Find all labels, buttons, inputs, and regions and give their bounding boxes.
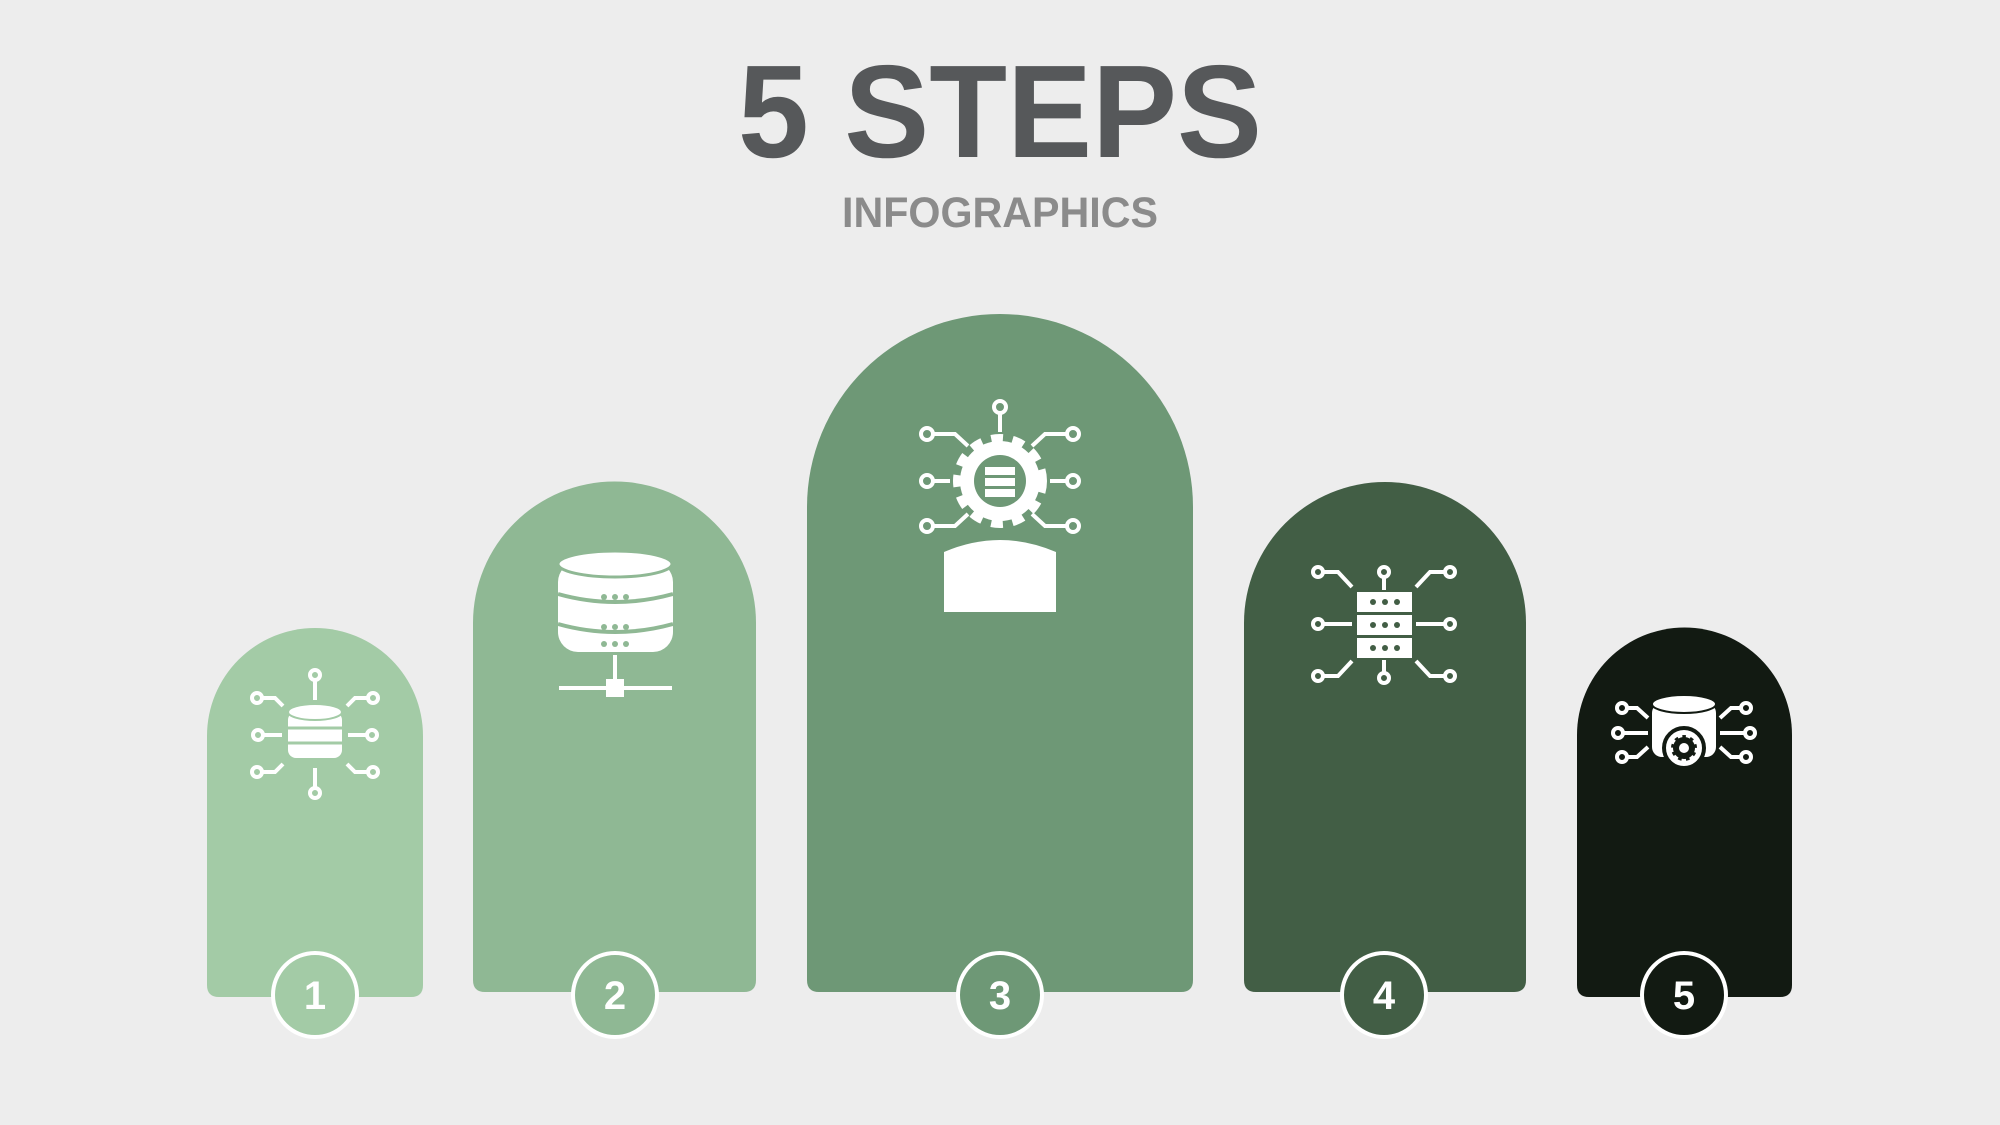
number badge 1: 1: [304, 974, 326, 1018]
number badge 2: 2: [604, 974, 626, 1018]
icon: database gear: [1613, 695, 1755, 768]
title: 5 STEPS: [738, 38, 1262, 185]
panel: step 1: [207, 628, 423, 997]
number badge 5: 5: [1673, 974, 1695, 1018]
number badge 3: [958, 953, 1042, 1037]
number badge 1: [273, 953, 357, 1037]
number badge 3: 3: [989, 974, 1011, 1018]
panel: step 4: [1244, 482, 1526, 992]
panel: step 2: [473, 482, 756, 992]
icon: gear with servers: [921, 401, 1079, 612]
number badge 2: [573, 953, 657, 1037]
subtitle: INFOGRAPHICS: [842, 189, 1158, 237]
panel: step 5: [1577, 628, 1792, 997]
icon: database network 1: [252, 670, 378, 798]
number badge 5: [1642, 953, 1726, 1037]
panel: step 3: [807, 314, 1193, 992]
number badge 4: 4: [1373, 974, 1396, 1018]
icon: server network: [1313, 567, 1455, 683]
icon: database server: [558, 551, 673, 697]
number badge 4: [1342, 953, 1426, 1037]
